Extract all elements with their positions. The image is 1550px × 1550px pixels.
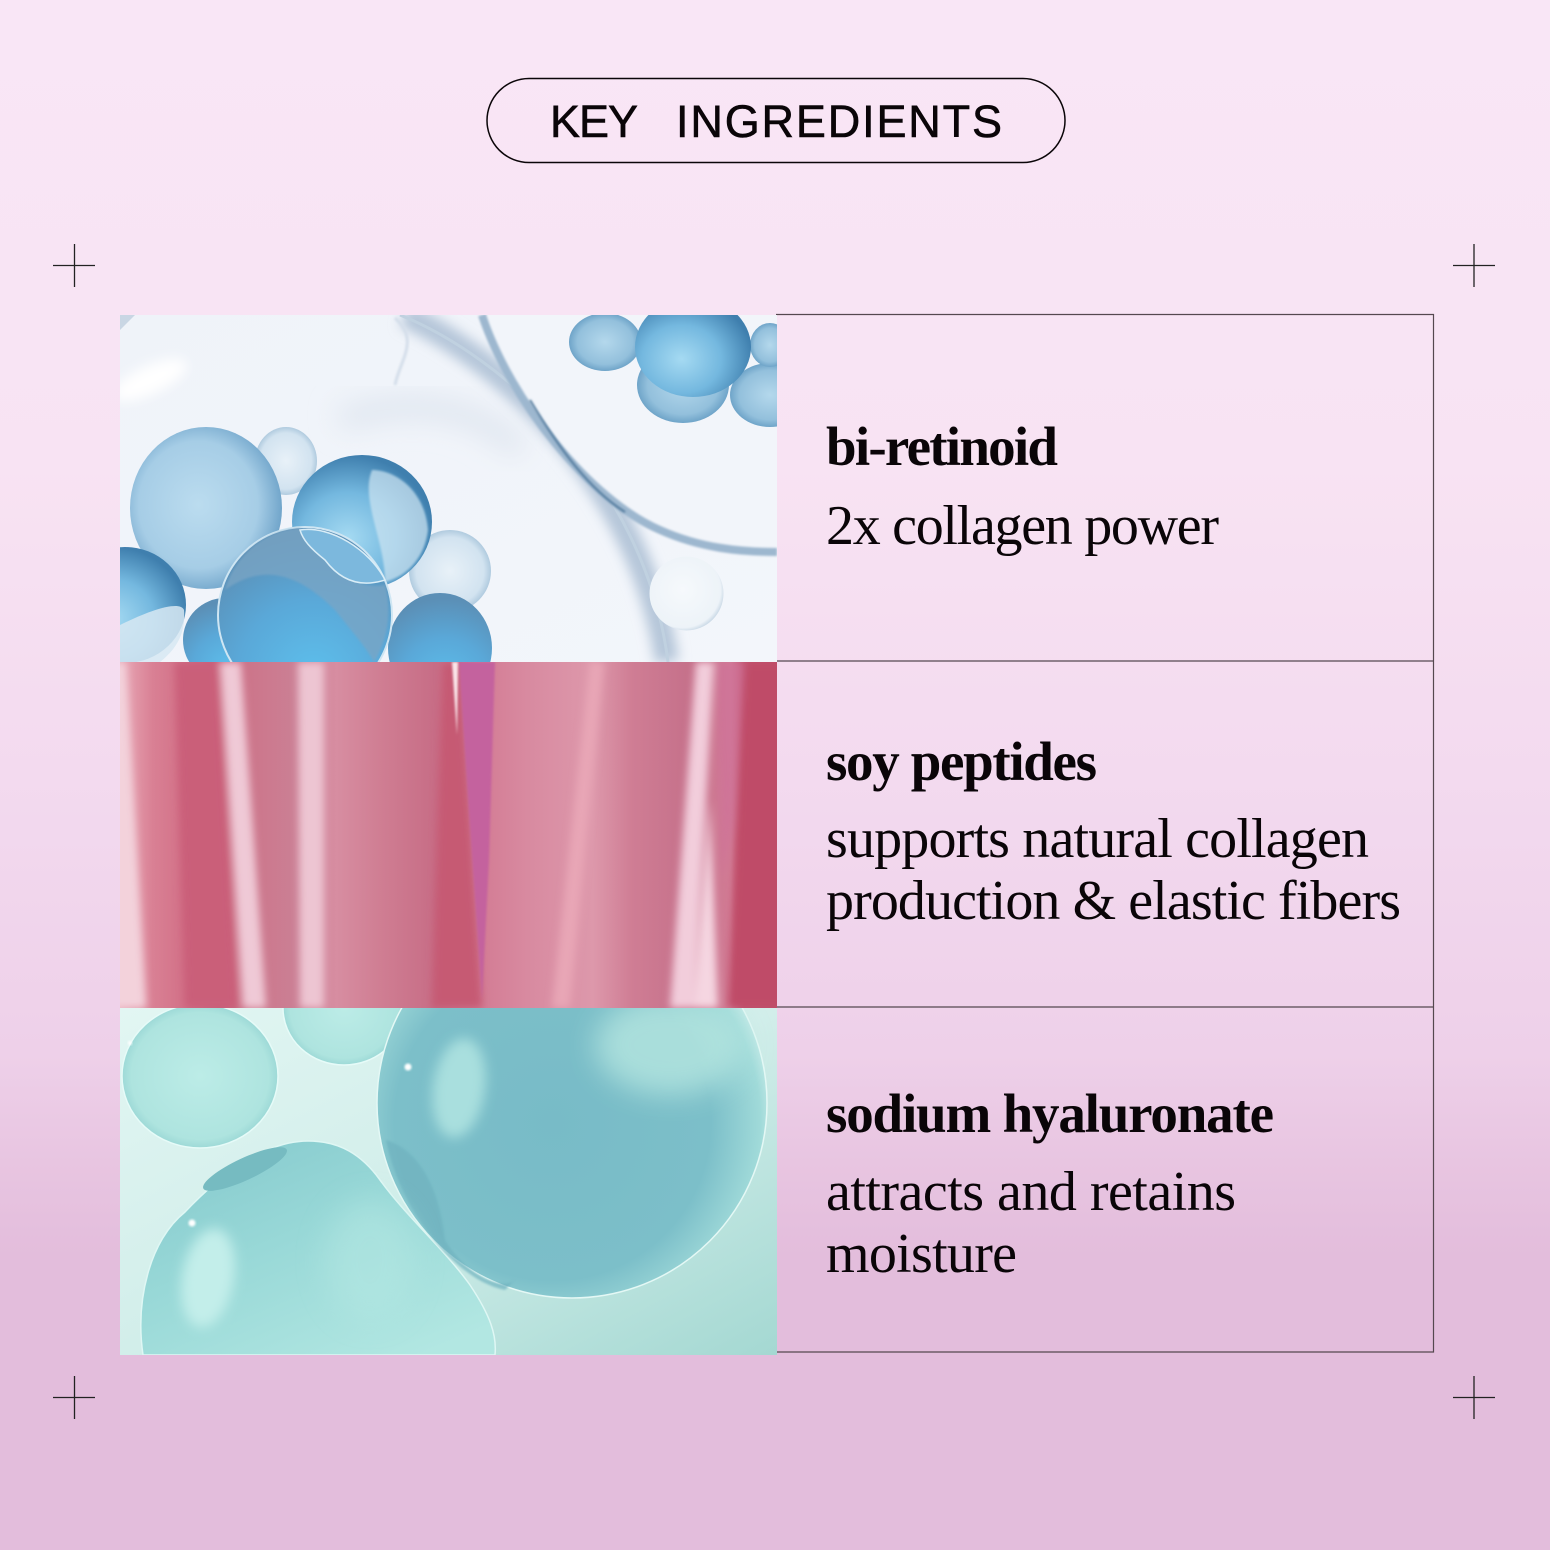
table frame <box>776 314 1434 1352</box>
row 2: soy peptides <box>826 731 1401 932</box>
row 1: bi-retinoid: 2x collagen power <box>826 495 1219 557</box>
row 2: soy peptides: production & elastic fibers <box>826 870 1401 932</box>
row 2: soy peptides: soy peptides <box>826 731 1097 792</box>
row 2: soy peptides: supports natural collagen <box>826 808 1369 870</box>
row 1: bi-retinoid: bi-retinoid <box>826 416 1058 477</box>
title: KEY <box>550 96 638 147</box>
image panel: blue bubbles <box>120 315 777 662</box>
row 3: sodium hyaluronate <box>826 1083 1274 1285</box>
row 1: bi-retinoid <box>826 416 1219 557</box>
row 3: sodium hyaluronate: sodium hyaluronate <box>826 1083 1274 1144</box>
image panel: teal bubbles <box>120 1008 777 1355</box>
corner crosses <box>53 244 1495 1419</box>
row 3: sodium hyaluronate: attracts and retains <box>826 1161 1236 1223</box>
row 3: sodium hyaluronate: moisture <box>826 1223 1017 1285</box>
title: INGREDIENTS <box>676 96 1002 147</box>
title pill <box>487 78 1065 162</box>
image panel: pink streaks <box>112 662 785 1008</box>
